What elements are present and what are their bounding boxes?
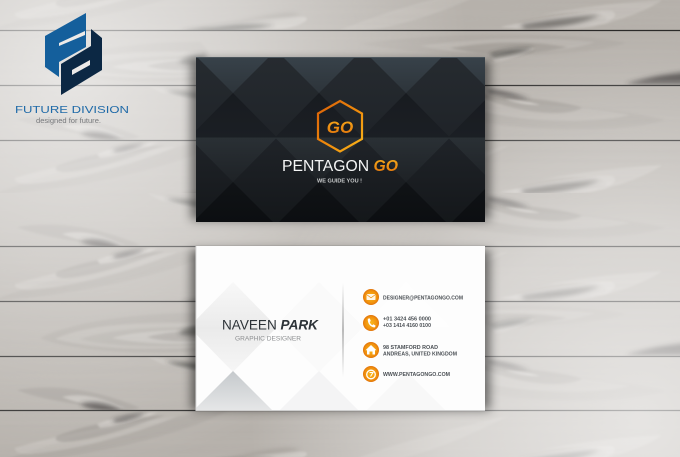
contact: website xyxy=(363,366,450,382)
tagline: WE GUIDE YOU ! xyxy=(317,178,362,184)
contact: address: 98 STAMFORD ROAD xyxy=(383,345,438,351)
contact: email xyxy=(363,289,463,305)
divider xyxy=(342,283,344,377)
icon: GO hexagon xyxy=(318,101,362,152)
contact: website: WWW.PENTAGONGO.COM xyxy=(383,372,450,378)
panel: dark card front xyxy=(189,57,536,222)
contact: email: DESIGNER@PENTAGONGO.COM xyxy=(383,295,463,301)
contact: phone: +01 3424 456 0000 xyxy=(383,316,431,322)
job title: GRAPHIC DESIGNER xyxy=(235,336,301,342)
icon: GO hexagon: GO xyxy=(327,118,353,137)
contact: phone xyxy=(363,315,431,331)
person name: NAVEEN PARK xyxy=(222,316,319,332)
contact: address: ANDREAS, UNITED KINGDOM xyxy=(383,352,457,358)
icon: FD hexagon mark xyxy=(45,13,102,95)
icon: globe xyxy=(363,366,379,382)
contact: phone: +03 1414 4160 0100 xyxy=(383,323,431,329)
logo name: FUTURE DIVISION xyxy=(15,104,129,116)
shadow: cards xyxy=(191,60,490,410)
icon: envelope xyxy=(363,289,379,305)
icon: phone xyxy=(363,315,379,331)
icon: house xyxy=(363,342,379,358)
logo: Future Division xyxy=(15,13,129,125)
logo tagline: designed for future. xyxy=(36,118,101,125)
contact: address xyxy=(363,342,457,358)
panel: white card back xyxy=(189,246,485,411)
brand name: PENTAGON GO xyxy=(282,158,399,175)
